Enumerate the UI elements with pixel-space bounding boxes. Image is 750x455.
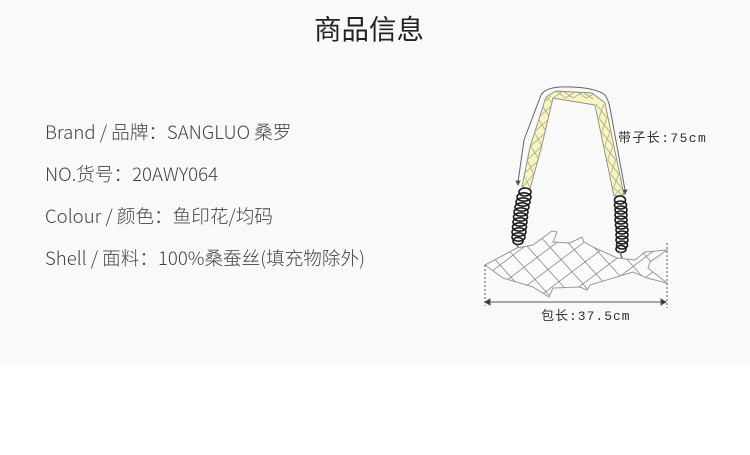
title: 商品信息 (314, 7, 424, 47)
spec: colour: Colour / 颜色：鱼印花/均码 (45, 202, 273, 229)
spec list (45, 118, 365, 271)
strap length arrow (516, 87, 627, 194)
fish bag (484, 230, 669, 298)
width dimension (485, 243, 667, 308)
right chain (614, 196, 628, 258)
spec: item number: NO.货号：20AWY064 (45, 160, 218, 187)
strap (522, 91, 624, 196)
spec: shell material: Shell / 面料：100%桑蚕丝(填充物除外) (45, 244, 365, 271)
left chain (512, 188, 531, 249)
product diagram (484, 86, 706, 321)
strap length label: 带子长:75cm (618, 131, 707, 146)
bag length label: 包长:37.5cm (541, 309, 631, 324)
spec: brand: Brand / 品牌：SANGLUO 桑罗 (45, 118, 291, 145)
